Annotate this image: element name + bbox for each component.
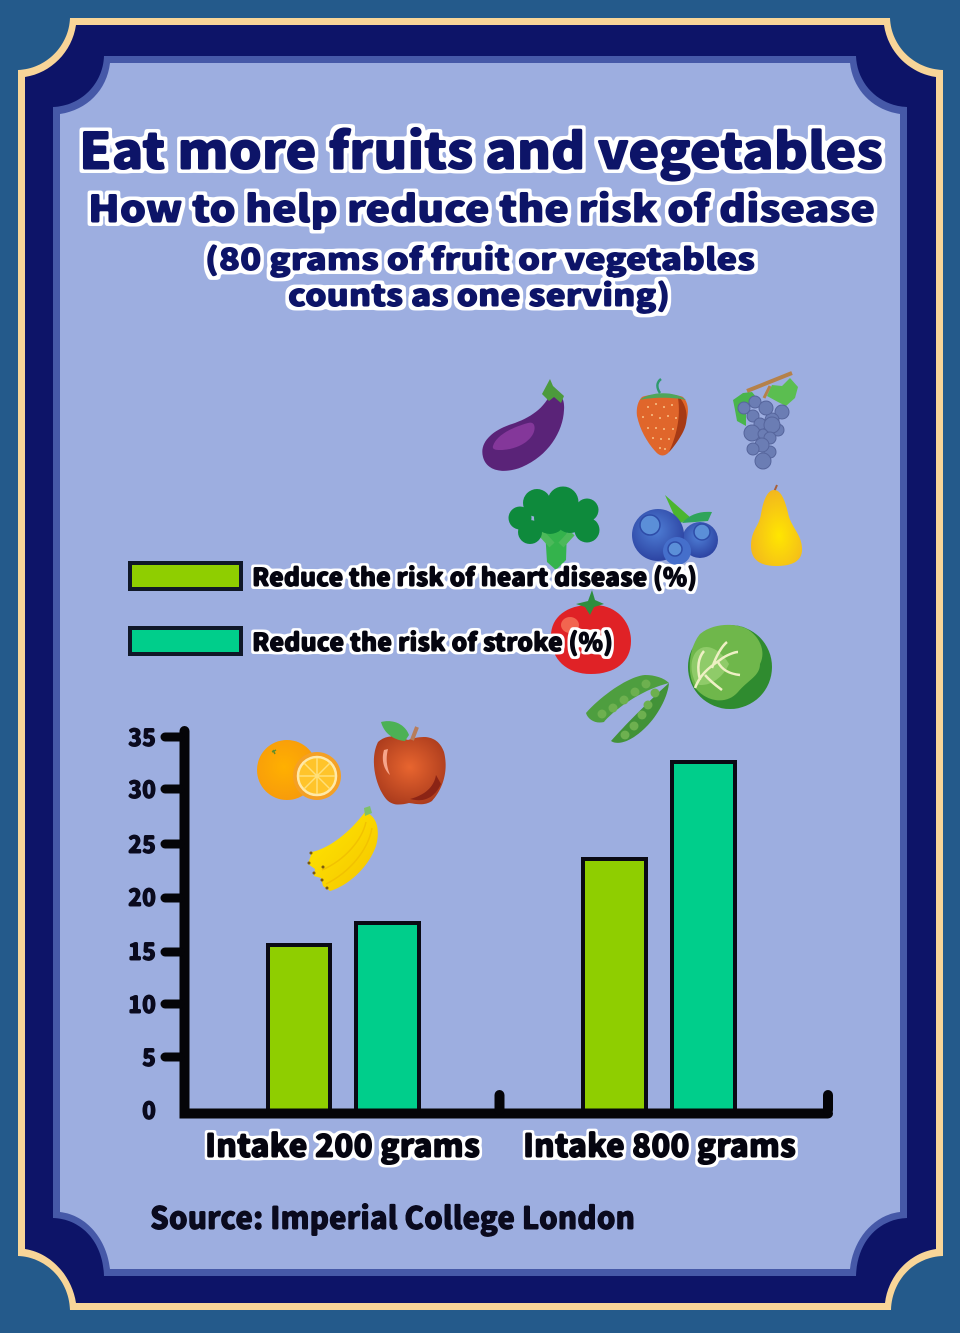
legend label: heart disease: Reduce the risk of heart disease (%) [252,558,697,594]
title: Eat more fruits and vegetables [79,112,883,184]
icon: apple [374,721,446,805]
x-axis label: 200 grams: Intake 200 grams [205,1121,480,1167]
legend [130,558,697,659]
bar: 800 grams heart disease [583,859,646,1111]
x-axis label: 800 grams: Intake 800 grams [523,1121,796,1167]
icon: bananas [308,806,378,891]
y-axis labels: 0 [142,1091,156,1126]
y-axis labels: 35 [128,718,156,753]
bar chart [128,718,828,1167]
y-axis labels: 5 [142,1038,156,1073]
y-axis labels: 30 [128,770,156,805]
source note: Source: Imperial College London [150,1193,635,1238]
icon: strawberry [637,379,688,456]
icon: grapes [733,373,798,469]
bar: 800 grams stroke [672,762,735,1111]
y-axis labels: 20 [128,878,156,913]
title block [79,112,883,315]
bar: 200 grams stroke [356,923,419,1111]
serving note line 1: (80 grams of fruit or vegetables [205,235,755,279]
legend swatch: stroke [130,628,241,654]
y-axis labels [128,718,156,1126]
icon: orange [257,740,341,800]
icon: pear [751,485,802,566]
y-axis labels: 15 [128,932,156,967]
y-axis labels: 25 [128,825,156,860]
icon: broccoli [508,486,600,570]
icon: pea pods [586,675,669,743]
subtitle: How to help reduce the risk of disease [88,179,875,233]
icon: cabbage [688,625,772,709]
icon: tomato [551,590,631,674]
legend label: stroke: Reduce the risk of stroke (%) [252,623,613,659]
y-axis labels: 10 [128,985,156,1020]
legend swatch: heart disease [130,563,241,589]
icon: blueberries [632,495,718,565]
chart axes and ticks [165,731,828,1114]
serving note line 2: counts as one serving) [288,271,670,315]
bar: 200 grams heart disease [268,945,330,1111]
icon: eggplant [482,379,564,471]
